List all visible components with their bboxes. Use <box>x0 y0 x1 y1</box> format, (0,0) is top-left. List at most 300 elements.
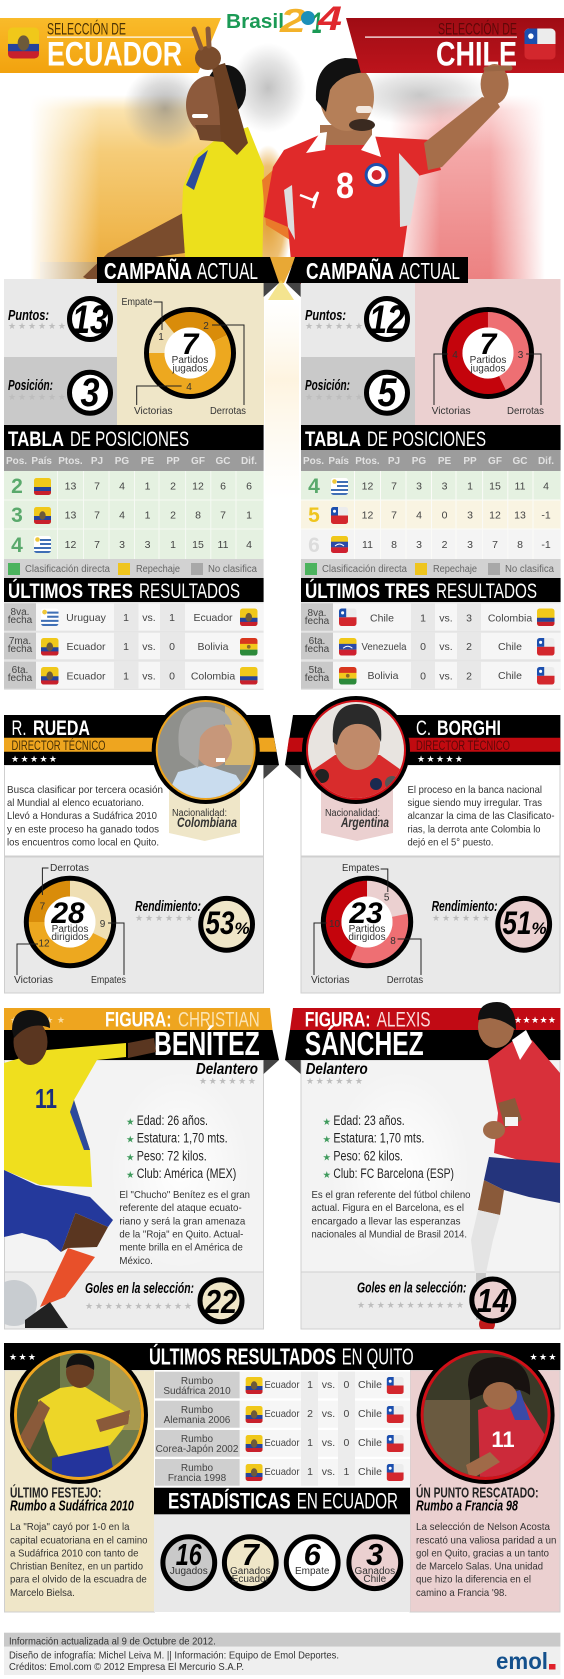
nationality tag: Nacionalidad: <box>172 808 227 819</box>
title: Brasil 2014 logo: Brasil <box>226 11 284 33</box>
row: Chile: 13 <box>514 510 526 522</box>
row: Alemania 2006 <box>164 1405 404 1426</box>
row: Uruguay: 1 <box>467 480 473 492</box>
legend: Repechaje <box>433 564 477 575</box>
text: un punto rescatado: camino a Francia '98. <box>416 1587 507 1599</box>
stat: 7 ganados Ecuador: Ecuador <box>232 1574 270 1585</box>
row: Alemania 2006: 2 <box>307 1408 313 1420</box>
stat: rendimiento 51% <box>432 898 550 950</box>
icon: Chile player celebrating: 8 <box>336 165 354 206</box>
row: Chile: 12 <box>489 510 501 522</box>
row: Venezuela: 6 <box>308 534 320 557</box>
photo: un punto rescatado: 11 <box>491 1427 515 1452</box>
nationality tag: Argentina <box>340 814 389 830</box>
legend: No clasifica <box>208 564 257 575</box>
panel: figura Sánchez: ★★★★★ <box>514 1016 556 1026</box>
row: Colombia: 12 <box>192 480 204 492</box>
row: Uruguay: 11 <box>515 480 526 492</box>
list: datos Benítez: ★ <box>126 1170 135 1181</box>
row: Alemania 2006: Chile <box>358 1408 382 1420</box>
row: Sudáfrica 2010 <box>163 1376 404 1397</box>
panel: director técnico Ecuador: R. <box>12 717 26 740</box>
panel: últimos resultados en Quito <box>4 1342 560 1612</box>
text: bio Borghi <box>408 784 555 848</box>
row: Ecuador: 4 <box>119 510 125 522</box>
title: Brasil 2014 logo <box>226 0 342 40</box>
panel: tabla de posiciones Chile <box>301 425 561 578</box>
icon: Ecuador player celebrating <box>83 63 264 284</box>
stat: 6 empate <box>286 1537 338 1589</box>
row: Alemania 2006: 0 <box>343 1408 349 1420</box>
glow between panels <box>265 257 299 500</box>
portrait: C. Borghi <box>302 696 410 804</box>
row: 6ta fecha: Colombia <box>191 670 235 682</box>
row: Ecuador: 7 <box>94 510 100 522</box>
row: Uruguay: 12 <box>65 539 76 551</box>
list: datos Benítez: Peso: 72 kilos. <box>137 1148 207 1163</box>
stat: 3 ganados Chile: 3 <box>366 1537 383 1572</box>
heading: campaña actual Chile <box>286 257 468 297</box>
text: posición Chile: ★★★★★★ <box>305 393 363 403</box>
list: datos Benítez: Edad: 26 años. <box>137 1113 208 1128</box>
panel: director técnico Chile: ★★★★★ <box>417 755 463 765</box>
row: 6ta fecha <box>4 662 264 689</box>
panel: tabla de posiciones Ecuador <box>4 425 264 578</box>
row: 8va fecha: fecha <box>8 615 33 626</box>
panel: tabla de posiciones Chile: DE POSICIONES <box>367 428 486 451</box>
text: bio Benítez <box>119 1189 250 1267</box>
chart: donut partidos dirigidos Borghi: dirigidos <box>348 932 386 943</box>
row: Chile <box>308 504 551 527</box>
panel: director técnico Ecuador <box>4 696 279 993</box>
text: puntos Chile: Puntos: <box>305 307 346 324</box>
text: último festejo: capital ecuatoriana en el camino <box>10 1534 148 1546</box>
text: posición Ecuador: Posición: <box>8 377 53 394</box>
row: 7ma fecha: Bolivia <box>198 641 229 653</box>
row: 7ma fecha: vs. <box>142 641 156 653</box>
list: datos Sánchez: Peso: 62 kilos. <box>333 1148 403 1163</box>
row: Uruguay: 15 <box>489 480 501 492</box>
stat: rendimiento 53%: % <box>234 919 250 938</box>
panel: director técnico Ecuador: DIRECTOR TÉCNICO <box>12 738 106 753</box>
stat: rendimiento 53%: 53 <box>206 905 235 941</box>
row: 6ta fecha: Chile <box>498 641 522 653</box>
chart: donut partidos jugados Chile: jugados <box>469 364 506 374</box>
list: datos Benítez <box>126 1113 236 1181</box>
panel: tabla de posiciones Ecuador: GF <box>191 456 205 467</box>
row: Sudáfrica 2010: Ecuador <box>264 1379 300 1391</box>
row: 6ta fecha: 1 <box>123 670 129 682</box>
legend <box>301 559 561 578</box>
text: bio Benítez: El "Chucho" Benítez es el gran <box>119 1189 250 1201</box>
heading: estadísticas en Ecuador: ESTADÍSTICAS <box>168 1488 291 1513</box>
row: Sudáfrica 2010: Chile <box>358 1379 382 1391</box>
row: Venezuela <box>308 534 551 557</box>
panel: figura Benítez <box>0 1008 279 1329</box>
text: bio Rueda: y en este proceso ha ganado todos <box>7 824 159 836</box>
row: 6ta fecha: Venezuela <box>362 641 407 653</box>
panel: tabla de posiciones Ecuador: Pos. <box>6 456 27 467</box>
stat: 6 empate: 6 <box>304 1537 322 1572</box>
chart: donut partidos dirigidos Rueda: 28 <box>50 897 85 930</box>
row: 6ta fecha: 2 <box>466 641 472 653</box>
text: un punto rescatado: Rumbo a Francia 98 <box>416 1498 518 1515</box>
panel: tabla de posiciones Chile: Pos. <box>303 456 324 467</box>
legend <box>4 559 264 578</box>
panel: Chile header band <box>346 18 564 74</box>
panel: figura Sánchez: ALEXIS <box>377 1008 431 1032</box>
row: 6ta fecha: Ecuador <box>66 670 106 682</box>
stat: 7 ganados Ecuador: Ganados <box>230 1566 271 1577</box>
row: Uruguay: 12 <box>362 480 373 492</box>
text: último festejo: Marcelo Bielsa. <box>10 1587 75 1599</box>
stat: posición 5 <box>366 371 408 415</box>
text: puntos Ecuador: Puntos: <box>8 307 49 324</box>
chart: donut partidos jugados Chile: 4 <box>452 350 458 361</box>
row: Chile: 12 <box>362 510 373 522</box>
panel: Chile header band: CHILE <box>436 36 517 74</box>
row: 5ta fecha: 5ta. <box>309 665 325 676</box>
text: bio Rueda: los encuentros como local en Quito. <box>7 836 159 848</box>
stat: goles Sánchez <box>357 1279 514 1321</box>
row: 5ta fecha <box>301 662 561 689</box>
text: bio Sánchez: encargado a llevar las esperanzas <box>312 1215 460 1227</box>
legend: Clasificación directa <box>25 564 110 575</box>
chart: donut partidos jugados Chile: Victorias <box>432 406 471 417</box>
list: datos Sánchez: ★ <box>322 1152 331 1163</box>
panel: tabla de posiciones Ecuador: Dif. <box>241 456 257 467</box>
stat: posición 3 <box>70 371 110 415</box>
text: bio Rueda <box>7 784 163 848</box>
stat: 3 ganados Chile: Ganados <box>355 1566 395 1577</box>
row: Colombia: 6 <box>246 480 252 492</box>
row: 6ta fecha: 6ta. <box>12 665 28 676</box>
text: último festejo: Christian Benítez, en un partido <box>10 1560 143 1572</box>
row: 7ma fecha: 0 <box>169 641 175 653</box>
legend: Clasificación directa <box>322 564 407 575</box>
heading: últimos resultados en Quito: ★★★ <box>9 1353 36 1363</box>
row: Francia 1998: 1 <box>343 1466 349 1478</box>
panel: director técnico Chile <box>285 696 560 993</box>
chart: donut partidos jugados Ecuador <box>122 297 246 417</box>
panel: figura Benítez: ★★★★★ <box>10 1016 65 1026</box>
chart: donut partidos jugados Ecuador: 4 <box>186 382 192 393</box>
row: Ecuador <box>11 504 252 527</box>
row: 7ma fecha: Ecuador <box>66 641 106 653</box>
heading: campaña actual Ecuador: ACTUAL <box>197 258 258 284</box>
chart: donut partidos dirigidos Borghi: Victorias <box>311 975 350 986</box>
panel: tabla de posiciones Ecuador: PP <box>166 456 180 467</box>
panel: figura Benítez: CHRISTIAN <box>178 1008 260 1032</box>
heading: últimos resultados en Quito: ★★★ <box>530 1353 556 1363</box>
panel: tabla de posiciones Chile: TABLA <box>305 428 361 451</box>
list: datos Benítez: ★ <box>126 1117 135 1128</box>
chart: donut partidos jugados Ecuador: Derrotas <box>210 406 246 417</box>
heading: últimos resultados en Quito <box>4 1342 560 1370</box>
row: Uruguay: 11 <box>218 539 229 551</box>
chart: donut partidos dirigidos Rueda: 9 <box>100 919 106 930</box>
heading: campaña actual Chile: ACTUAL <box>399 258 460 284</box>
row: Francia 1998: Chile <box>358 1466 382 1478</box>
heading: campaña actual Ecuador <box>97 257 279 297</box>
row: Uruguay: 3 <box>145 539 151 551</box>
text: bio Sánchez: Es el gran referente del fútbol chileno <box>312 1189 471 1201</box>
chart: donut partidos dirigidos Borghi: 8 <box>390 936 396 947</box>
stat: 12 puntos: 12 <box>369 298 405 342</box>
row: 8va fecha: Colombia <box>488 612 532 624</box>
panel: tabla de posiciones Chile: PJ <box>388 456 400 467</box>
row: Venezuela: 8 <box>391 539 397 551</box>
nationality tag: Nacionalidad: <box>325 808 380 819</box>
stat: rendimiento 51%: % <box>531 919 547 938</box>
stat: goles Sánchez: 14 <box>477 1282 509 1319</box>
row: 8va fecha: fecha <box>305 616 330 627</box>
logo: emol: emol <box>496 1648 548 1674</box>
row: Uruguay <box>11 534 252 557</box>
row: Francia 1998: Ecuador <box>264 1466 300 1478</box>
panel: tabla de posiciones Ecuador: GC <box>216 456 230 467</box>
heading: campaña actual Chile: CAMPAÑA <box>306 257 394 284</box>
panel: tabla de posiciones Chile: PE <box>438 456 451 467</box>
chart: donut partidos jugados Chile: Derrotas <box>507 406 544 417</box>
row: 7ma fecha <box>4 633 264 659</box>
text: un punto rescatado: gol en Quito, gracias a un tanto <box>416 1547 549 1559</box>
chart: donut partidos dirigidos Rueda: Victorias <box>14 975 53 986</box>
text: un punto rescatado: que hizo la diferencia en el <box>416 1574 531 1586</box>
panel: tabla de posiciones Ecuador: PJ <box>91 456 103 467</box>
panel: últimos tres resultados Chile <box>301 578 561 690</box>
row: 8va fecha: 3 <box>466 612 472 624</box>
text: último festejo: La "Roja" cayó por 1-0 en la <box>10 1521 130 1533</box>
chart: donut partidos jugados Ecuador: jugados <box>171 364 208 374</box>
row: Colombia: 1 <box>145 480 151 492</box>
row: 8va fecha: 8va. <box>308 608 326 619</box>
chart: donut partidos jugados Chile: 7 <box>480 328 498 361</box>
row: Sudáfrica 2010: vs. <box>322 1379 335 1391</box>
row: Ecuador: 2 <box>170 510 176 522</box>
legend: No clasifica <box>505 564 554 575</box>
panel: últimos tres resultados Ecuador: RESULTADOS <box>139 580 240 603</box>
row: 7ma fecha: fecha <box>8 644 33 655</box>
row: Uruguay: 4 <box>308 475 320 498</box>
row: Uruguay: 3 <box>416 480 422 492</box>
list: datos Sánchez: ★ <box>322 1135 331 1146</box>
row: Corea-Japón 2002: Chile <box>358 1437 382 1449</box>
title: Brasil 2014 logo: 1 <box>312 7 322 40</box>
text: bio Borghi: dejó en el 5° puesto. <box>408 836 494 848</box>
chart: donut partidos jugados Ecuador: Partidos <box>172 355 208 366</box>
footer: Créditos: Emol.com © 2012 Empresa El Mercurio S.A.P. <box>9 1661 244 1673</box>
text: posición Chile: Posición: <box>305 377 350 394</box>
text: Delantero: Delantero <box>306 1061 368 1078</box>
stat: 16 jugados: Jugados <box>170 1566 208 1577</box>
chart: donut partidos jugados Ecuador: 2 <box>203 321 209 332</box>
chart: donut partidos dirigidos Rueda: 7 <box>40 902 46 912</box>
row: Alemania 2006: vs. <box>322 1408 335 1420</box>
heading: últimos resultados en Quito: EN QUITO <box>342 1344 414 1370</box>
row: 8va fecha <box>301 603 561 631</box>
row: 8va fecha: 1 <box>169 612 175 624</box>
text: un punto rescatado <box>416 1484 557 1599</box>
row: 6ta fecha <box>301 633 561 659</box>
chart: donut partidos jugados Ecuador: 1 <box>158 332 164 343</box>
panel: figura Sánchez <box>285 1002 560 1332</box>
nationality tag <box>169 790 240 841</box>
chart: donut partidos jugados Ecuador: Empate <box>122 297 153 308</box>
text: bio Sánchez: nacionales al Mundial de Brasil 2014. <box>312 1228 467 1240</box>
panel: director técnico Ecuador: RUEDA <box>33 717 90 740</box>
panel: director técnico Chile: BORGHI <box>437 717 501 740</box>
panel: Ecuador header band: ECUADOR <box>47 36 182 74</box>
nationality tag: Colombiana <box>177 814 237 830</box>
text: puntos Ecuador <box>8 307 66 332</box>
row: Venezuela: 2 <box>442 539 448 551</box>
row: Venezuela: 8 <box>517 539 523 551</box>
stat: goles Benítez <box>85 1280 242 1322</box>
text: posición Ecuador <box>8 377 66 403</box>
stat: rendimiento 53%: Rendimiento: <box>135 899 201 915</box>
row: Uruguay: 4 <box>11 534 23 557</box>
row: Francia 1998: 1 <box>307 1466 313 1478</box>
panel: tabla de posiciones Chile: GF <box>488 456 502 467</box>
photo: un punto rescatado <box>417 1346 555 1484</box>
row: Uruguay: 15 <box>192 539 204 551</box>
panel: tabla de posiciones Chile: PP <box>463 456 477 467</box>
row: 8va fecha: vs. <box>142 612 156 624</box>
nationality tag <box>321 790 393 841</box>
panel: últimos tres resultados Ecuador <box>4 578 264 690</box>
chart: donut partidos jugados Ecuador: 7 <box>182 328 200 361</box>
text: Delantero: ★★★★★★ <box>306 1077 363 1087</box>
row: Ecuador: 13 <box>65 510 76 522</box>
list: datos Sánchez: ★ <box>322 1170 331 1181</box>
text: bio Borghi: sigue siendo muy irregular. Tras <box>408 797 542 809</box>
stat: 16 jugados <box>163 1537 215 1589</box>
chart: donut partidos dirigidos Rueda: dirigidos <box>51 932 89 943</box>
row: Uruguay: 3 <box>442 480 448 492</box>
panel: tabla de posiciones Ecuador: PE <box>141 456 154 467</box>
panel: últimos tres resultados Ecuador: ÚLTIMOS TRES <box>8 579 133 603</box>
row: Colombia: 2 <box>11 475 23 498</box>
panel: figura Sánchez: SÁNCHEZ <box>305 1025 424 1062</box>
panel: tabla de posiciones Ecuador: Ptos. <box>58 456 83 467</box>
text: Delantero <box>306 1061 368 1087</box>
row: Ecuador: 8 <box>195 510 201 522</box>
row: Corea-Japón 2002: Rumbo <box>181 1434 214 1445</box>
panel: tabla de posiciones Ecuador: País <box>31 456 52 467</box>
row: Venezuela: 3 <box>416 539 422 551</box>
list: datos Sánchez <box>322 1113 454 1181</box>
row: 6ta fecha: vs. <box>142 670 156 682</box>
panel: tabla de posiciones Ecuador: TABLA <box>8 428 64 451</box>
stat: 13 puntos: 13 <box>72 298 108 342</box>
row: 5ta fecha: 0 <box>420 670 426 682</box>
row: Sudáfrica 2010: Rumbo <box>181 1376 214 1387</box>
row: Francia 1998: Rumbo <box>181 1463 214 1474</box>
row: Francia 1998: Francia 1998 <box>168 1473 227 1484</box>
photo: último festejo <box>10 1346 148 1484</box>
footer: Información actualizada al 9 de Octubre de 2012. <box>9 1635 216 1647</box>
chart: donut partidos dirigidos Borghi: Derrotas <box>387 975 423 986</box>
text: un punto rescatado: La selección de Nelson Acosta <box>416 1521 550 1533</box>
row: Venezuela: 7 <box>492 539 498 551</box>
list: datos Sánchez: Club: FC Barcelona (ESP) <box>333 1166 454 1181</box>
text: bio Rueda: Llevó a Honduras a Sudáfrica 2010 <box>7 810 157 822</box>
row: 5ta fecha: fecha <box>305 673 330 684</box>
list: datos Benítez: Club: América (MEX) <box>137 1166 236 1181</box>
text: último festejo: para el olvido de la escuadra de <box>10 1574 147 1586</box>
heading: últimos resultados en Quito: ÚLTIMOS RESULTADOS <box>149 1342 336 1370</box>
text: un punto rescatado: de Marcelo Salas. Una unidad <box>416 1560 543 1572</box>
stat: 6 empate: Empate <box>295 1566 330 1577</box>
text: bio Borghi: rias, la derrota ante Colombia lo <box>408 824 541 836</box>
panel: Ecuador header band <box>0 18 221 74</box>
text: bio Benítez: de la "Roja" en Quito. Actual- <box>119 1228 244 1240</box>
row: Alemania 2006: Alemania 2006 <box>164 1415 231 1426</box>
panel: tabla de posiciones Chile: PG <box>412 456 426 467</box>
panel: Chile header band: SELECCIÓN DE <box>438 20 517 38</box>
panel: tabla de posiciones Chile: Ptos. <box>355 456 380 467</box>
row: Alemania 2006: Ecuador <box>264 1408 300 1420</box>
chart: donut partidos dirigidos Borghi: Empates <box>342 863 380 874</box>
stat: rendimiento 51%: ★★★★★★ <box>432 914 490 924</box>
text: Delantero: Delantero <box>196 1061 258 1078</box>
row: Chile: 3 <box>467 510 473 522</box>
panel: director técnico Chile: C. <box>416 717 431 740</box>
stat: 16 jugados: 16 <box>176 1537 202 1572</box>
panel: tabla de posiciones Ecuador: PG <box>115 456 129 467</box>
text: bio Benítez: riano y será la gran amenaza <box>119 1215 245 1227</box>
text: puntos Chile: ★★★★★★ <box>305 322 363 332</box>
chart: donut partidos dirigidos Borghi: Partidos <box>349 924 385 935</box>
row: 5ta fecha: 2 <box>466 670 472 682</box>
list: datos Sánchez: Estatura: 1,70 mts. <box>333 1131 424 1146</box>
row: 8va fecha: 8va. <box>11 607 29 618</box>
text: un punto rescatado: rescató una valiosa paridad a un <box>416 1534 557 1546</box>
title: Brasil 2014 logo: 4 <box>317 0 342 38</box>
list: datos Benítez: Estatura: 1,70 mts. <box>137 1131 228 1146</box>
row: Corea-Japón 2002: Ecuador <box>264 1437 300 1449</box>
row: 8va fecha: Ecuador <box>193 612 233 624</box>
text: posición Ecuador: ★★★★★★ <box>8 393 66 403</box>
chart: donut partidos jugados Ecuador: Victorias <box>134 406 172 417</box>
row: Chile: 0 <box>442 510 448 522</box>
row: Venezuela: 3 <box>467 539 473 551</box>
stat: goles Benítez: 22 <box>204 1283 238 1320</box>
row: 5ta fecha: Bolivia <box>368 670 399 682</box>
text: último festejo: a Sudáfrica 2010 con tanto de <box>10 1547 139 1559</box>
stat: goles Sánchez: ★★★★★★★★★★★ <box>357 1301 464 1311</box>
panel: figura Benítez: BENÍTEZ <box>154 1025 260 1062</box>
row: Colombia: 13 <box>65 480 76 492</box>
text: bio Borghi: El proceso en la banca nacional <box>408 784 542 796</box>
panel: campaña Chile <box>301 279 560 425</box>
panel: tabla de posiciones Chile: País <box>328 456 349 467</box>
row: Ecuador: 1 <box>145 510 151 522</box>
row: Ecuador: 7 <box>220 510 226 522</box>
text: Delantero <box>196 1061 258 1087</box>
row: Corea-Japón 2002: vs. <box>322 1437 335 1449</box>
stat: rendimiento 53%: ★★★★★★ <box>135 914 193 924</box>
row: Colombia: 4 <box>119 480 125 492</box>
text: puntos Ecuador: ★★★★★★ <box>8 322 66 332</box>
row: 6ta fecha: 0 <box>169 670 175 682</box>
row: 8va fecha <box>4 603 264 631</box>
panel: director técnico Ecuador: ★★★★★ <box>11 755 57 765</box>
row: Corea-Japón 2002 <box>156 1434 404 1455</box>
chart: donut partidos dirigidos Rueda <box>14 863 126 986</box>
stat: posición 5: 5 <box>378 371 397 415</box>
